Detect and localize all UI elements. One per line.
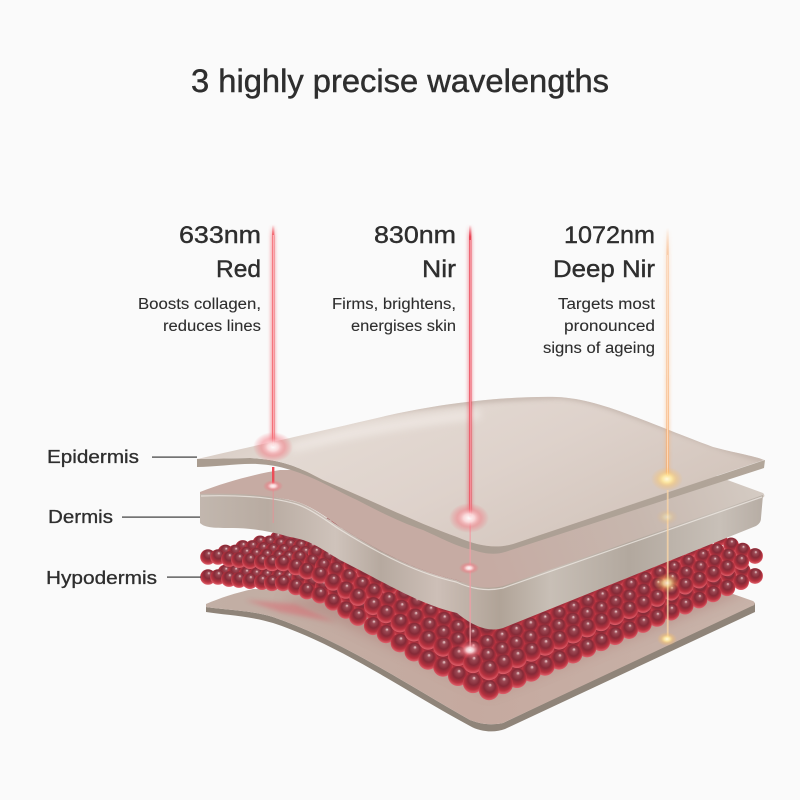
beam: 830nm nir xyxy=(449,225,489,659)
glow: epidermis deep nir xyxy=(651,467,683,491)
glow: beads nir xyxy=(457,641,483,659)
glow: dermis deep nir xyxy=(656,509,678,525)
glow: dermis red xyxy=(263,480,283,492)
label column: 1072nm: Targets most xyxy=(558,296,656,313)
label column: 1072nm: signs of ageing xyxy=(543,340,655,357)
callout: epidermis: Epidermis xyxy=(47,447,139,467)
glow: dermis nir xyxy=(459,562,479,574)
glow: epidermis red xyxy=(253,432,293,462)
glow: bottom plate deep nir xyxy=(657,632,677,646)
beads: lower layer xyxy=(200,483,763,700)
layer: bottom plate xyxy=(206,580,755,731)
glow: epidermis nir xyxy=(449,503,489,533)
label column: 830nm: 830nm xyxy=(374,222,456,249)
label column: 1072nm xyxy=(543,222,656,357)
glow: beads deep nir xyxy=(654,573,680,593)
label column: 830nm: energises skin xyxy=(351,318,456,335)
beads: upper layer xyxy=(200,463,763,680)
layer: dermis xyxy=(200,470,764,629)
label column: 1072nm: Deep Nir xyxy=(553,256,655,283)
label column: 830nm: Firms, brightens, xyxy=(332,296,456,313)
label column: 633nm: Boosts collagen, xyxy=(138,296,261,313)
label column: 633nm: 633nm xyxy=(179,222,261,249)
label column: 633nm xyxy=(138,222,261,335)
label column: 1072nm: pronounced xyxy=(564,318,655,335)
label column: 830nm xyxy=(332,222,456,335)
beam: 1072nm deep nir xyxy=(651,228,683,646)
callout: dermis: Dermis xyxy=(48,507,113,527)
layer: epidermis xyxy=(197,396,770,554)
label column: 633nm: Red xyxy=(216,256,261,283)
label column: 633nm: reduces lines xyxy=(163,318,261,335)
beam: 633nm red xyxy=(253,225,293,523)
label column: 1072nm: 1072nm xyxy=(564,222,655,249)
title: 3 highly precise wavelengths xyxy=(191,63,609,99)
label column: 830nm: Nir xyxy=(422,256,456,283)
callout: hypodermis: Hypodermis xyxy=(46,568,157,588)
layer: hypodermis beads xyxy=(200,463,763,700)
